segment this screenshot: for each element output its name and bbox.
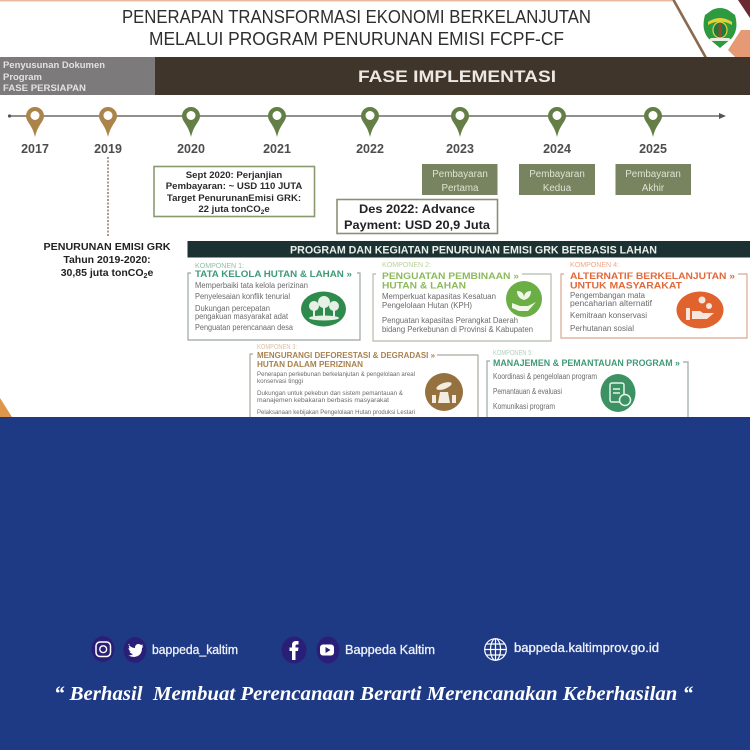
text block: penurunan emisi: e (147, 267, 153, 279)
icon: trees (301, 292, 346, 326)
payment box: akhir: Akhir (642, 183, 665, 194)
panel: komponen 2: Penguatan kapasitas Perangkat Daerah (382, 316, 518, 325)
year labels (21, 142, 667, 156)
panel: komponen 3 (250, 344, 478, 417)
text block: penurunan emisi: PENURUNAN EMISI GRK (44, 241, 171, 253)
panel: komponen 2: Pengelolaan Hutan (KPH) (382, 301, 472, 310)
panel: komponen 5: Pemantauan & evaluasi (493, 387, 562, 396)
payment box: kedua: Kedua (543, 183, 572, 194)
callout: sept 2020 (154, 166, 314, 216)
callout: sept 2020: Target PenurunanEmisi GRK: (167, 193, 301, 204)
panel: komponen 2: Memperkuat kapasitas Kesatuan (382, 292, 496, 301)
icon: instagram (92, 636, 114, 662)
program heading bar: PROGRAM DAN KEGIATAN PENURUNAN EMISI GRK BERBASIS LAHAN (290, 244, 657, 256)
panel: komponen 4: Pengembangan mata (570, 291, 646, 300)
handle: bappeda_kaltim: bappeda_kaltim (152, 643, 238, 657)
panel: komponen 2: HUTAN & LAHAN (382, 280, 466, 292)
panel: komponen 3: Penerapan perkebunan berkelanjutan & pengelolaan areal (257, 371, 415, 378)
handle: bappeda kaltim: Bappeda Kaltim (345, 643, 435, 657)
year labels: 2025 (639, 142, 667, 156)
icon: youtube (316, 636, 340, 664)
year labels: 2020 (177, 142, 205, 156)
panel: komponen 3: MENGURANGI DEFORESTASI & DEGRADASI » (257, 350, 435, 360)
dotted connector 2019 (107, 157, 109, 236)
website url: bappeda.kaltimprov.go.id (514, 641, 659, 655)
timeline axis (8, 113, 726, 119)
panel: fase persiapan: FASE PERSIAPAN (3, 83, 86, 94)
program heading bar (188, 241, 750, 258)
payment box: pertama: Pembayaran (432, 169, 488, 180)
year labels: 2021 (263, 142, 291, 156)
panel: fase persiapan (0, 57, 155, 95)
payment box: akhir: Pembayaran (625, 169, 681, 180)
panel: fase implementasi (155, 57, 750, 95)
panel: komponen 5: KOMPONEN 5: (493, 350, 533, 357)
panel: komponen 4 (561, 262, 747, 338)
timeline pins (26, 107, 662, 137)
text block: penurunan emisi: 2 (144, 273, 148, 280)
panel: komponen 4: pencaharian alternatif (570, 299, 653, 308)
icon: twitter (124, 637, 146, 663)
panel: komponen 5: Koordinasi & pengelolaan program (493, 372, 597, 381)
panel: komponen 2: PENGUATAN PEMBINAAN » (382, 271, 519, 282)
panel: komponen 3: KOMPONEN 3: (257, 344, 297, 351)
panel: komponen 1: KOMPONEN 1: (195, 263, 244, 270)
title (122, 6, 591, 49)
panel: komponen 5: MANAJEMEN & PEMANTAUAN PROGRAM » (493, 358, 680, 369)
corner decoration: bottom left (0, 398, 12, 417)
callout: des 2022: Payment: USD 20,9 Juta (344, 220, 491, 232)
panel: komponen 4: UNTUK MASYARAKAT (570, 280, 682, 292)
callout: sept 2020: 2 (261, 209, 265, 216)
year labels: 2019 (94, 142, 122, 156)
callout: des 2022 (337, 200, 498, 234)
panel: komponen 1: Penguatan perencanaan desa (195, 323, 294, 332)
payment box: pertama (422, 164, 498, 195)
tagline: “ Berhasil Membuat Perencanaan Berarti Merencanakan Keberhasilan “ (54, 683, 693, 705)
panel: komponen 1: TATA KELOLA HUTAN & LAHAN » (195, 269, 352, 280)
callout: sept 2020: 22 juta tonCO (198, 204, 261, 215)
panel: komponen 3: Dukungan untuk pekebun dan sistem pemantauan & (257, 390, 404, 397)
panel: komponen 3: HUTAN DALAM PERIZINAN (257, 359, 363, 369)
panel: fase persiapan: Penyusunan Dokumen (3, 60, 105, 71)
panel: komponen 3: konservasi tinggi (257, 378, 303, 385)
icon: provincial crest (704, 8, 736, 48)
panel: komponen 4: ALTERNATIF BERKELANJUTAN » (570, 271, 735, 282)
icon: globe (485, 639, 506, 660)
panel: komponen 5: Komunikasi program (493, 402, 555, 411)
panel: komponen 1: Memperbaiki tata kelola perizinan (195, 281, 308, 290)
panel: fase persiapan: Program (3, 72, 42, 83)
year labels: 2024 (543, 142, 571, 156)
panel: komponen 1 (188, 263, 360, 340)
title: PENERAPAN TRANSFORMASI EKONOMI BERKELANJUTAN (122, 6, 591, 27)
payment box: kedua (519, 164, 595, 195)
year labels: 2023 (446, 142, 474, 156)
title: MELALUI PROGRAM PENURUNAN EMISI FCPF-CF (149, 28, 564, 49)
panel: komponen 3: manajemen kebakaran berbasis masyarakat (257, 397, 389, 404)
panel: komponen 5 (487, 350, 688, 417)
payment box: kedua: Pembayaran (529, 169, 585, 180)
panel: komponen 2 (373, 262, 551, 341)
callout: sept 2020: Pembayaran: ~ USD 110 JUTA (166, 181, 302, 192)
callout: sept 2020: e (264, 204, 270, 215)
panel: komponen 4: Perhutanan sosial (570, 324, 634, 333)
icon: document check (600, 374, 636, 412)
panel: komponen 2: bidang Perkebunan di Provinsi & Kabupaten (382, 325, 533, 334)
icon: hand with seedling (506, 281, 542, 317)
icon: facebook (282, 636, 306, 664)
callout: des 2022: Des 2022: Advance (359, 204, 475, 216)
panel: komponen 1: Dukungan percepatan (195, 304, 270, 313)
panel: komponen 2: KOMPONEN 2: (382, 262, 431, 269)
panel: komponen 1: pengakuan masyarakat adat (195, 312, 289, 321)
panel: komponen 1: Penyelesaian konflik tenurial (195, 292, 290, 301)
corner decoration: top right (672, 0, 750, 57)
payment box: akhir (616, 164, 691, 195)
year labels: 2017 (21, 142, 49, 156)
panel: komponen 4: KOMPONEN 4: (570, 262, 619, 269)
callout: sept 2020: Sept 2020: Perjanjian (186, 170, 282, 181)
year labels: 2022 (356, 142, 384, 156)
slide area (0, 0, 750, 417)
icon: tree stump (425, 373, 463, 411)
icon: hand with coins (676, 292, 724, 328)
text block: penurunan emisi (44, 241, 171, 280)
panel: komponen 4: Kemitraan konservasi (570, 311, 647, 320)
panel: fase implementasi: FASE IMPLEMENTASI (358, 67, 556, 86)
payment box: pertama: Pertama (441, 183, 479, 194)
text block: penurunan emisi: Tahun 2019-2020: (63, 254, 151, 266)
panel: komponen 3: Pelaksanaan kebijakan Pengelolaan Hutan produksi Lestari (257, 409, 415, 416)
footer background (0, 417, 750, 750)
text block: penurunan emisi: 30,85 juta tonCO (61, 267, 144, 279)
